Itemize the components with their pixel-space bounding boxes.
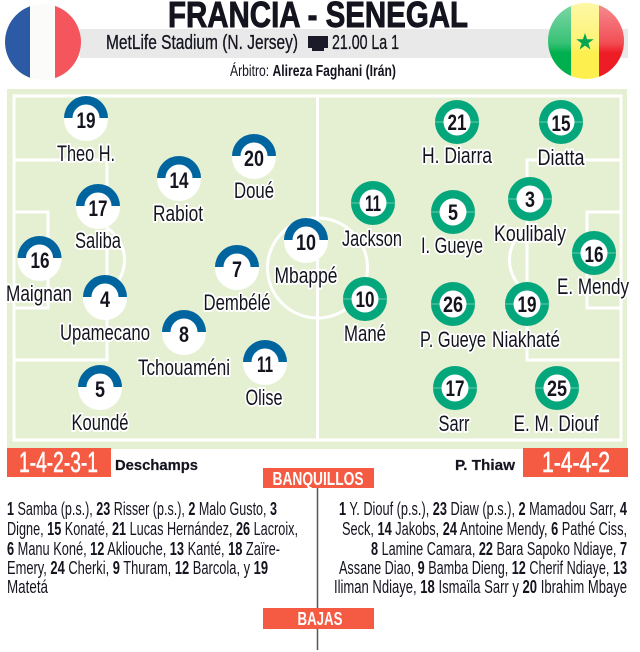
player 5 I. Gueye: I. Gueye <box>421 233 483 258</box>
player 5 I. Gueye: 5 <box>448 200 458 225</box>
player 5 Koundé: Koundé <box>72 410 128 435</box>
player 21 H. Diarra: H. Diarra <box>422 143 492 168</box>
player 3 Koulibaly: Koulibaly <box>494 221 567 246</box>
player 19 Niakhaté: 19 <box>518 292 536 317</box>
player 14 Rabiot: 14 <box>170 168 189 193</box>
broadcast text: 21.00 La 1 <box>332 32 399 54</box>
player 16 E. Mendy: 16 <box>584 242 604 267</box>
text: France substitutes: Matetá <box>7 577 49 597</box>
France players <box>6 96 338 435</box>
player 17 Sarr <box>433 366 477 436</box>
player 19 Niakhaté <box>492 282 560 352</box>
player 25 E. M. Diouf: 25 <box>547 376 567 401</box>
player 19 Niakhaté: Niakhaté <box>492 327 560 352</box>
referee: Árbitro: Alireza Faghani (Irán) <box>230 63 396 80</box>
player 3 Koulibaly: 3 <box>525 187 535 212</box>
player 4 Upamecano: Upamecano <box>60 320 150 345</box>
formation: France: 1-4-2-3-1 <box>19 447 98 479</box>
text: Senegal substitutes <box>334 499 627 597</box>
heading: Banquillos: BANQUILLOS <box>272 469 364 489</box>
player 25 E. M. Diouf: E. M. Diouf <box>514 411 599 436</box>
heading: Bajas: BAJAS <box>298 609 342 629</box>
player 25 E. M. Diouf <box>514 366 599 436</box>
player 5 Koundé <box>72 365 128 435</box>
player 16 Maignan <box>6 236 72 306</box>
player 20 Doué: Doué <box>234 178 274 203</box>
player 17 Saliba <box>75 184 121 253</box>
player 17 Saliba: Saliba <box>75 228 121 253</box>
player 11 Olise <box>243 340 287 410</box>
text: France substitutes: 6 Manu Koné, 12 Akliouche, 13 Kanté, 18 Zaïre- <box>7 539 280 559</box>
player 11 Olise: 11 <box>257 352 273 377</box>
player 7 Dembélé: 7 <box>232 257 242 282</box>
player 15 Diatta: 15 <box>552 111 570 136</box>
player 11 Jackson: 11 <box>365 191 381 216</box>
player 10 Mbappé: Mbappé <box>274 263 338 288</box>
player 11 Jackson: Jackson <box>342 226 402 251</box>
player 20 Doué <box>232 134 276 203</box>
Senegal players <box>342 100 630 436</box>
player 14 Rabiot: Rabiot <box>153 201 204 226</box>
player 8 Tchouaméni: 8 <box>179 322 189 347</box>
icon: France flag <box>5 4 81 80</box>
pitch <box>7 89 627 449</box>
icon: Senegal flag <box>548 3 624 79</box>
player 7 Dembélé: Dembélé <box>204 290 270 315</box>
text: Senegal substitutes: Assane Diao, 9 Bamba Dieng, 12 Cherif Ndiaye, 13 <box>339 558 627 578</box>
player 16 Maignan: 16 <box>30 248 50 273</box>
player 11 Jackson <box>342 181 402 251</box>
centre divider <box>316 488 318 650</box>
player 5 Koundé: 5 <box>95 377 105 402</box>
player 15 Diatta: Diatta <box>538 145 585 170</box>
player 19 Theo H. <box>57 96 115 166</box>
text: France substitutes: 1 Samba (p.s.), 23 Risser (p.s.), 2 Malo Gusto, 3 <box>7 499 277 519</box>
coach: Deschamps: Deschamps <box>115 457 198 474</box>
text: France substitutes: Digne, 15 Konaté, 21 Lucas Hernández, 26 Lacroix, <box>7 519 298 539</box>
player 21 H. Diarra <box>422 100 492 168</box>
player 14 Rabiot <box>153 156 204 226</box>
player 8 Tchouaméni: Tchouaméni <box>138 355 230 380</box>
player 7 Dembélé <box>204 245 270 315</box>
player 26 P. Gueye <box>420 282 486 352</box>
player 10 Mbappé <box>274 218 338 288</box>
player 17 Sarr: 17 <box>446 376 464 401</box>
player 10 Mbappé: 10 <box>296 230 316 255</box>
player 20 Doué: 20 <box>244 146 264 171</box>
formation: Senegal: 1-4-4-2 <box>542 447 610 479</box>
player 10 Mané <box>343 277 387 346</box>
player 15 Diatta <box>538 100 585 170</box>
coach: P. Thiaw: P. Thiaw <box>455 457 515 474</box>
stadium text: MetLife Stadium (N. Jersey) <box>106 32 298 54</box>
player 26 P. Gueye: P. Gueye <box>420 327 486 352</box>
player 10 Mané: Mané <box>344 321 386 346</box>
player 4 Upamecano: 4 <box>100 287 110 312</box>
player 8 Tchouaméni <box>138 310 230 380</box>
player 19 Theo H.: Theo H. <box>57 141 115 166</box>
player 5 I. Gueye <box>421 190 483 258</box>
player 16 Maignan: Maignan <box>6 281 72 306</box>
player 10 Mané: 10 <box>356 287 374 312</box>
heading: Bajas <box>263 608 374 629</box>
icon: television <box>308 36 328 51</box>
player 26 P. Gueye: 26 <box>443 292 463 317</box>
text: France substitutes <box>7 499 298 597</box>
player 3 Koulibaly <box>494 177 567 246</box>
player 16 E. Mendy <box>557 231 630 299</box>
player 19 Theo H.: 19 <box>76 108 96 133</box>
header bar <box>80 29 628 58</box>
player 4 Upamecano <box>60 275 150 345</box>
player 17 Saliba: 17 <box>88 196 108 221</box>
text: France substitutes: Emery, 24 Cherki, 9 Thuram, 12 Barcola, y 19 <box>7 558 268 578</box>
player 21 H. Diarra: 21 <box>448 110 466 135</box>
player 11 Olise: Olise <box>246 385 282 410</box>
player 17 Sarr: Sarr <box>438 411 470 436</box>
